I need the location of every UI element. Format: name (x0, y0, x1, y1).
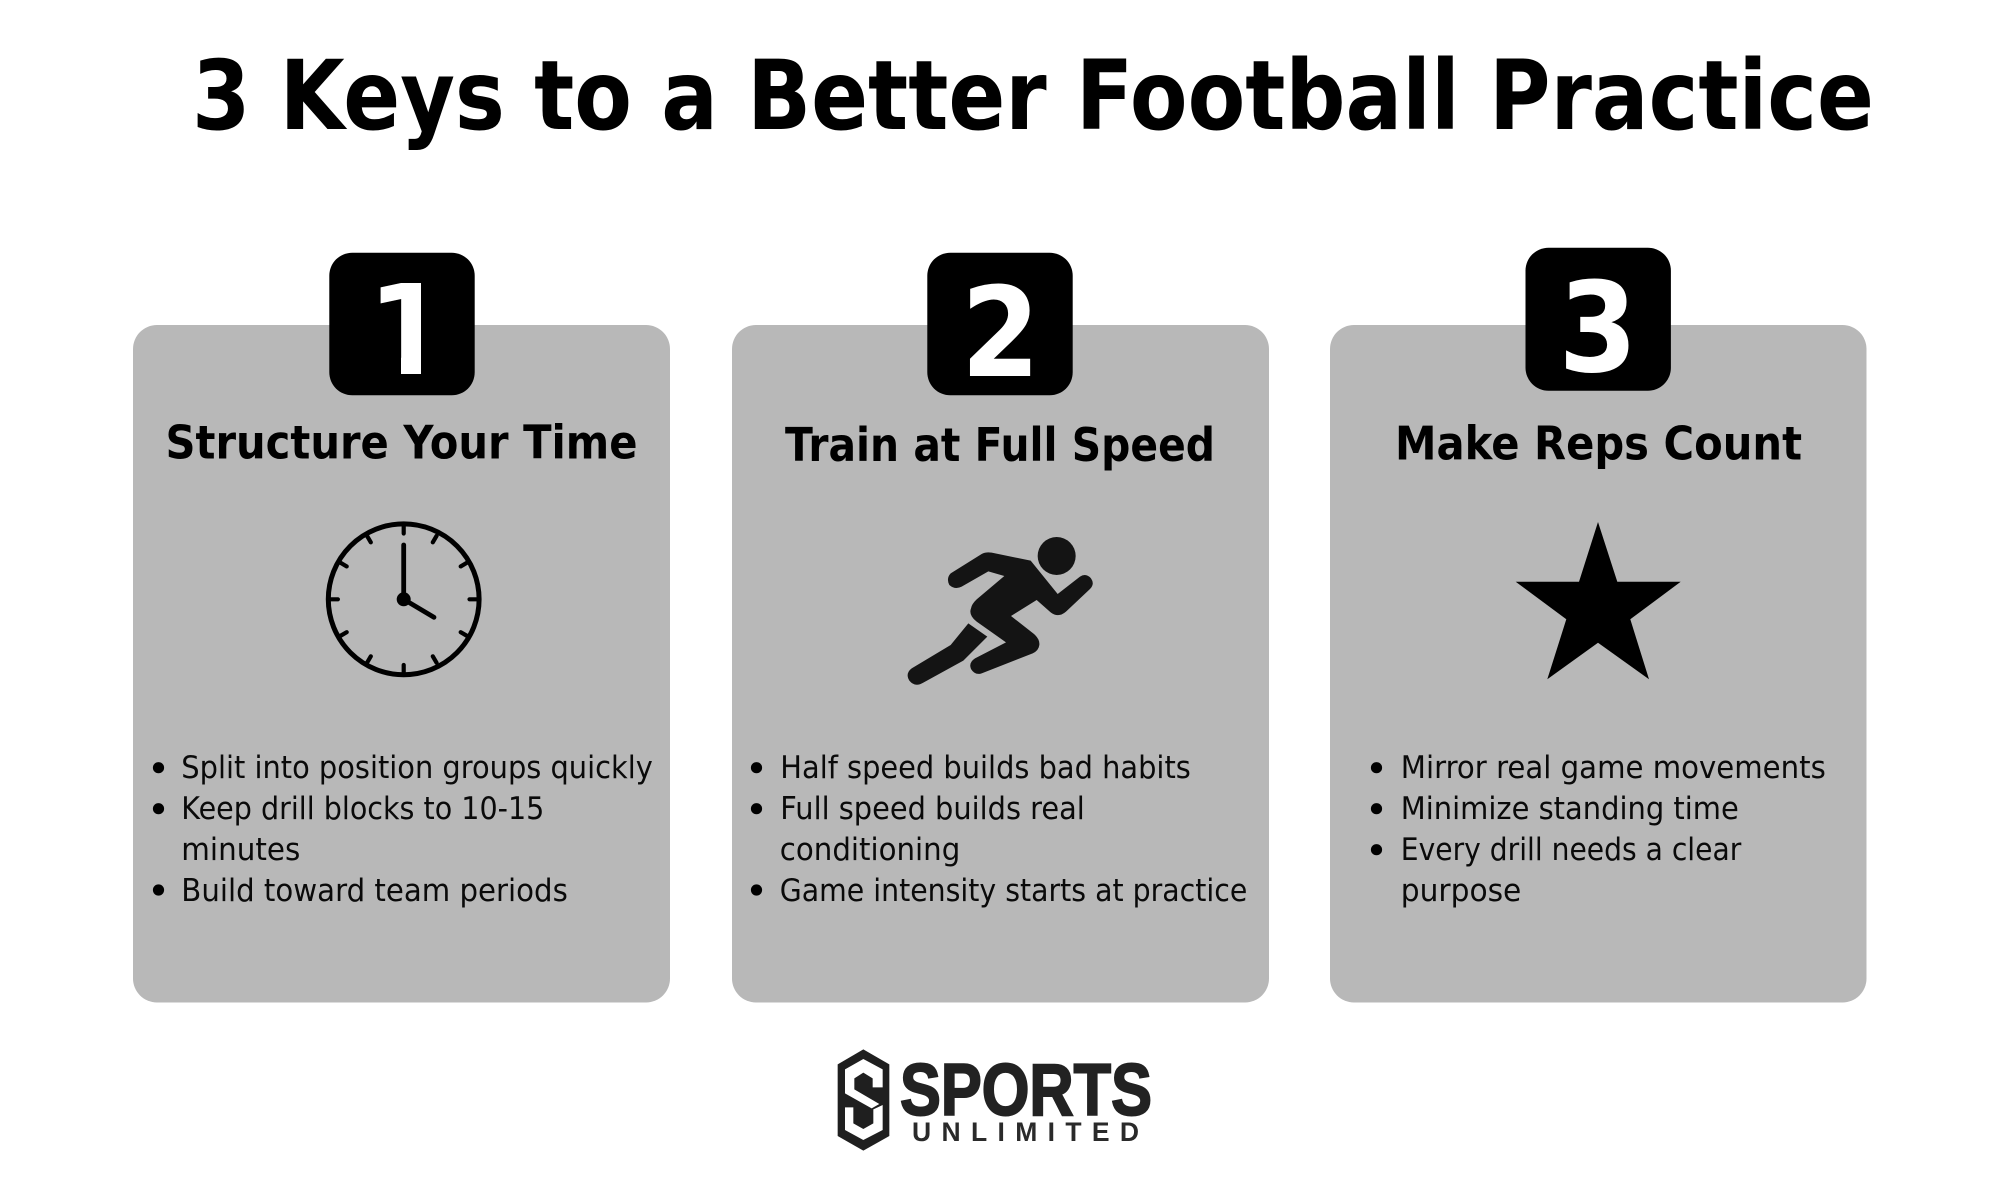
bullet list: Build toward team periods (181, 873, 568, 909)
bullet list: conditioning (780, 832, 960, 868)
bullet list: Half speed builds bad habits (780, 750, 1191, 786)
number badge 2: 2 (961, 261, 1040, 406)
heading: Structure Your Time (166, 416, 638, 470)
bullet list: Mirror real game movements (1401, 750, 1826, 786)
bullet list: Every drill needs a clear (1401, 832, 1742, 868)
icon: running figure (908, 537, 1093, 685)
heading: Train at Full Speed (785, 418, 1215, 472)
number badge 3: 3 (1558, 256, 1638, 401)
bullet list: Keep drill blocks to 10-15 (181, 791, 544, 827)
number badge 1 (329, 253, 475, 404)
panel: train at full speed (732, 253, 1269, 1002)
card background (133, 325, 670, 1002)
bullet list (751, 750, 1247, 909)
heading: Make Reps Count (1395, 416, 1802, 470)
number badge 1: 1 (367, 259, 451, 404)
panel: make reps count (1330, 248, 1866, 1002)
card background (1330, 325, 1866, 1002)
tagline: UNLIMITED (912, 1117, 1139, 1147)
number badge 2 (927, 253, 1073, 406)
icon: hexagon shield (838, 1049, 889, 1151)
panel: structure your time (133, 253, 670, 1002)
bullet list: Split into position groups quickly (181, 750, 653, 786)
bullet list: Full speed builds real (780, 791, 1085, 827)
icon: star (1516, 522, 1681, 679)
bullet list: Minimize standing time (1401, 791, 1739, 827)
bullet list: purpose (1401, 873, 1521, 909)
logo: sports unlimited (838, 1049, 1152, 1151)
icon: clock (328, 524, 479, 675)
card background (732, 325, 1269, 1002)
bullet list (153, 750, 653, 909)
bullet list: Game intensity starts at practice (780, 873, 1247, 909)
bullet list (1371, 750, 1826, 909)
wordmark: SPORTS (900, 1050, 1152, 1131)
number badge 3 (1526, 248, 1671, 401)
bullet list: minutes (181, 832, 300, 868)
